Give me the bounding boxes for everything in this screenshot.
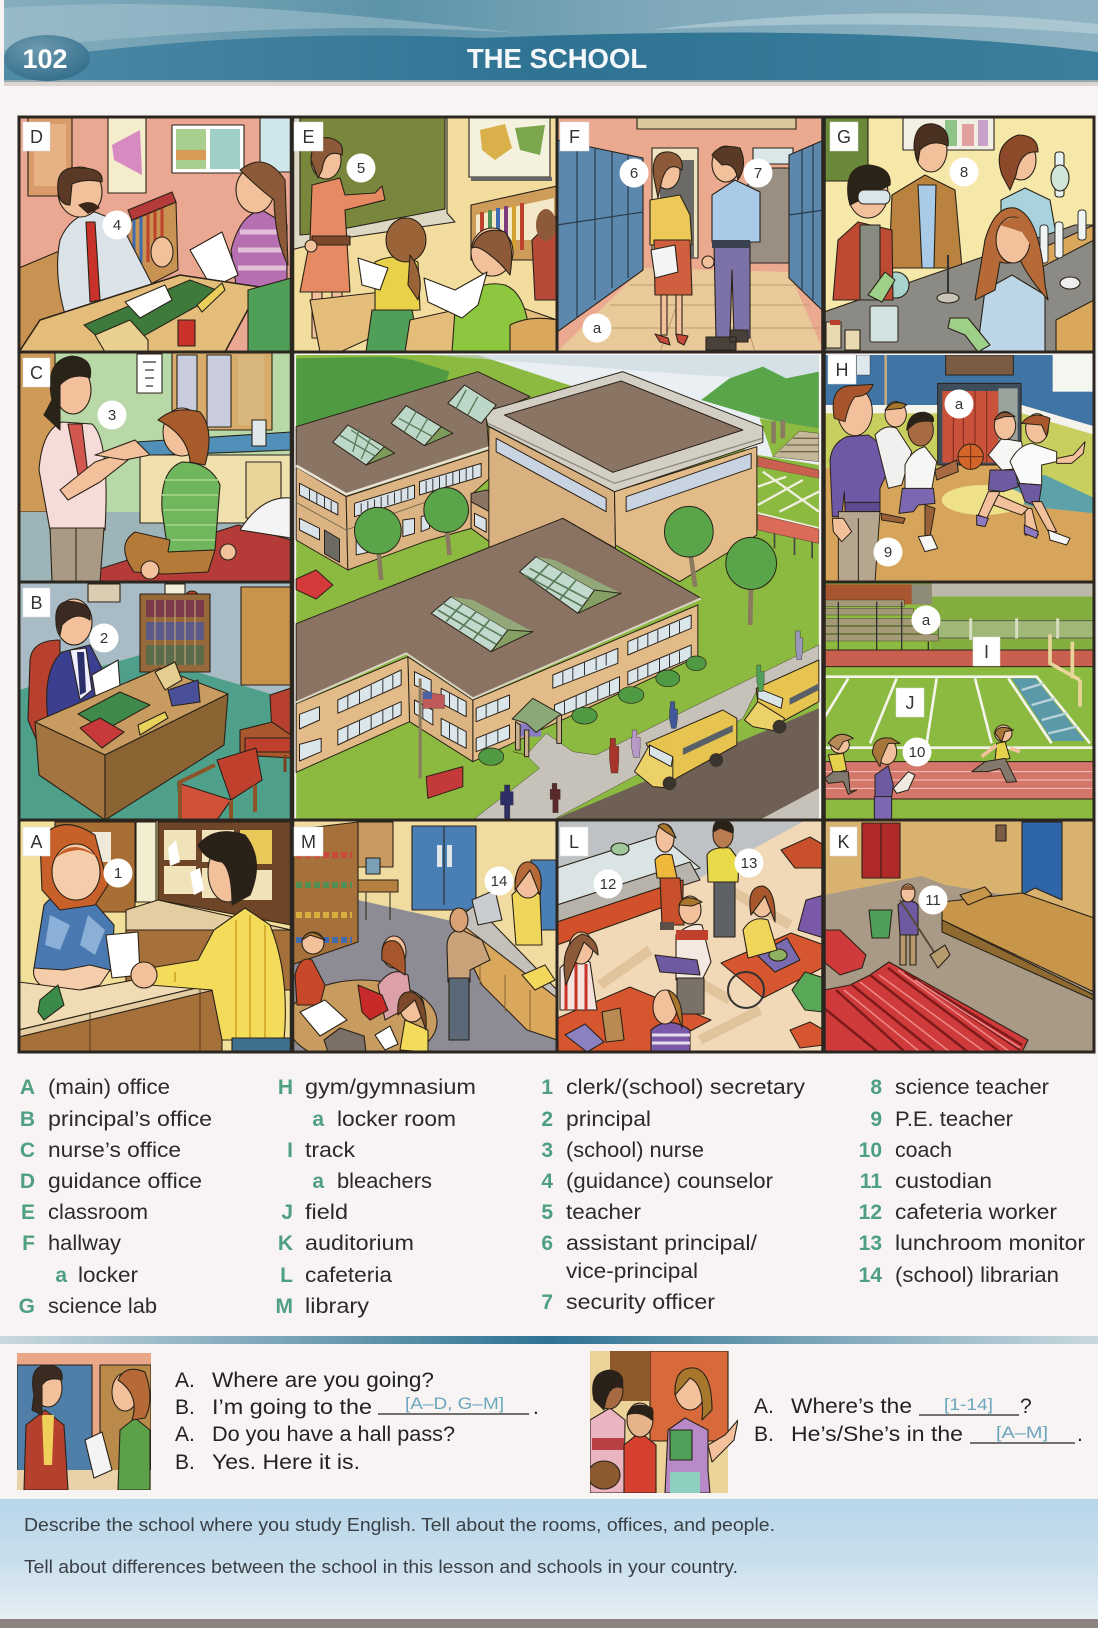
vocabulary list: people 8 to 14: cafeteria worker	[895, 1201, 1057, 1224]
vocabulary list: places A to G: guidance office	[48, 1170, 202, 1193]
student	[190, 162, 288, 300]
vocabulary list: places A to G: locker	[78, 1264, 138, 1287]
runners	[825, 725, 1020, 794]
vocabulary list: people 8 to 14: P.E. teacher	[895, 1108, 1013, 1131]
label I: I	[984, 642, 989, 662]
vocabulary list: places H to M: I	[287, 1139, 293, 1162]
callout 1: 1	[114, 865, 122, 882]
label C: C	[30, 363, 43, 383]
vocabulary list: places H to M: track	[305, 1139, 356, 1162]
panel C: nurse's office	[20, 354, 290, 580]
dialogue text: right: ?	[1020, 1395, 1032, 1418]
vocabulary list: places H to M: bleachers	[337, 1170, 432, 1193]
label E: E	[302, 127, 315, 147]
vocabulary list: places H to M	[276, 1076, 476, 1318]
discussion prompt 2: Tell about differences between the school in this lesson and schools in your country.	[24, 1557, 738, 1577]
callout 5	[346, 154, 376, 182]
vocabulary list: people 1 to 7: teacher	[566, 1201, 641, 1224]
callout 7	[744, 158, 772, 188]
pedestrians	[500, 631, 803, 818]
P.E. teacher	[830, 384, 890, 582]
callout 10	[902, 738, 932, 766]
athletic field	[758, 431, 819, 558]
bus 2	[744, 660, 819, 733]
cafeteria worker	[655, 824, 684, 930]
dialogue text: left: B.	[175, 1451, 195, 1474]
vocabulary list: places H to M: J	[281, 1201, 293, 1224]
vocabulary list: places H to M: locker room	[337, 1108, 456, 1131]
students	[875, 402, 1085, 552]
dialogue text: left: Do you have a hall pass?	[212, 1423, 455, 1446]
vocabulary list: places H to M: M	[276, 1295, 293, 1318]
callout 12	[594, 870, 622, 898]
label H	[828, 355, 856, 384]
upper student	[999, 135, 1069, 240]
bleachers	[825, 584, 938, 650]
dialogue text: left: .	[533, 1396, 539, 1419]
vocabulary list: people 1 to 7	[541, 1076, 806, 1314]
custodian	[898, 884, 950, 968]
callout 2	[90, 624, 118, 652]
dialogue illustration: right	[590, 1351, 738, 1493]
desk	[35, 662, 228, 820]
vocabulary list: places A to G	[19, 1076, 212, 1318]
label C	[23, 358, 50, 387]
vocabulary list: people 1 to 7: principal	[566, 1108, 651, 1131]
flag pole	[420, 678, 444, 778]
boy with goggles	[833, 165, 895, 302]
vocabulary list: places A to G: nurse’s office	[48, 1139, 181, 1162]
label F	[560, 122, 589, 151]
callout bleachers a: a	[922, 612, 931, 629]
label K	[830, 827, 857, 856]
dialogue text: left: B.	[175, 1396, 195, 1419]
panel A: main office	[20, 822, 290, 1050]
readers	[295, 932, 428, 1052]
chairs	[178, 688, 291, 820]
dialogue text: right: He’s/She’s in the	[791, 1423, 963, 1446]
tables	[557, 837, 824, 1052]
dialogue text: left: Yes. Here it is.	[212, 1451, 360, 1474]
callout 2: 2	[100, 630, 108, 647]
student in wheelchair	[728, 886, 777, 1008]
title: THE SCHOOL	[467, 43, 647, 74]
callout 14	[484, 866, 514, 896]
circulation desk	[456, 905, 557, 1040]
label A: A	[30, 832, 43, 852]
lower student	[948, 208, 1048, 352]
label E	[294, 122, 323, 151]
security officer	[702, 146, 760, 350]
vocabulary list: places A to G: E	[21, 1201, 35, 1224]
connector	[471, 490, 548, 547]
vocabulary list: people 8 to 14: 13	[859, 1232, 882, 1255]
label L: L	[569, 832, 579, 852]
vocabulary list: people 1 to 7: 4	[541, 1170, 553, 1193]
dialogue text: right: B.	[754, 1423, 774, 1446]
skylights on front roof	[431, 557, 621, 652]
label F: F	[569, 127, 580, 147]
door	[412, 826, 557, 930]
number callouts	[90, 154, 978, 914]
callout locker room a: a	[955, 396, 964, 413]
round table	[287, 980, 437, 1064]
counter	[19, 962, 230, 1030]
vocabulary list: people 1 to 7: vice-principal	[566, 1260, 698, 1283]
label M	[294, 827, 323, 856]
vocabulary list: people 1 to 7: security officer	[566, 1291, 715, 1314]
librarian	[472, 862, 542, 945]
trees background	[296, 357, 819, 457]
vocabulary list: people 8 to 14: lunchroom monitor	[895, 1232, 1085, 1255]
seated students	[560, 895, 824, 1052]
vocabulary list: places A to G: C	[20, 1139, 35, 1162]
callout 4	[102, 210, 132, 240]
vocabulary list: places A to G: principal’s office	[48, 1108, 212, 1131]
teacher	[300, 138, 385, 338]
dialogue text: right: A.	[754, 1395, 774, 1418]
student	[131, 832, 292, 1052]
panel L: cafeteria	[558, 822, 822, 1050]
vocabulary list: places H to M: auditorium	[305, 1232, 414, 1255]
callout 7: 7	[754, 165, 762, 182]
front building	[296, 518, 701, 772]
field	[825, 675, 1095, 752]
label B	[23, 588, 50, 617]
dialogue text: left: A.	[175, 1369, 195, 1392]
principal	[28, 599, 122, 760]
vocabulary list: people 8 to 14	[859, 1076, 1085, 1287]
vocabulary list: people 1 to 7: 7	[541, 1291, 553, 1314]
label G	[830, 122, 858, 151]
page number badge: 102	[22, 44, 68, 74]
callout 8	[950, 158, 978, 186]
callout 9	[874, 538, 902, 566]
callout 11: 11	[925, 892, 941, 909]
bookshelves	[291, 822, 358, 965]
dialogue text: left: I’m going to the	[212, 1396, 372, 1419]
seats	[824, 930, 1028, 1052]
callout 1	[104, 858, 132, 888]
bookcase	[140, 594, 210, 672]
vocabulary list: places H to M: L	[280, 1264, 293, 1287]
page number badge	[4, 35, 90, 81]
fence	[938, 618, 1095, 640]
label J: J	[906, 693, 914, 713]
vocabulary list: places A to G: A	[20, 1076, 35, 1099]
locker room	[938, 383, 1021, 465]
dialogue text: left: Where are you going?	[212, 1369, 434, 1392]
serving counter	[557, 835, 700, 945]
vocabulary list: people 1 to 7: 6	[541, 1232, 553, 1255]
vocabulary list: places H to M: gym/gymnasium	[305, 1076, 476, 1099]
discussion prompt 1: Describe the school where you study English. Tell about the rooms, offices, and people.	[24, 1515, 775, 1535]
callout 5: 5	[357, 160, 365, 177]
cabinet	[172, 352, 272, 430]
callout 8: 8	[960, 164, 968, 181]
dialogue text: right: [1-14]	[944, 1395, 993, 1414]
label I	[973, 637, 1000, 666]
panel: school building aerial view	[296, 355, 820, 818]
panel frame lines	[19, 117, 1094, 1052]
vocabulary list: places A to G: a	[55, 1264, 67, 1287]
bookcase	[19, 202, 178, 352]
clerk	[34, 825, 114, 995]
vocabulary list: people 8 to 14: 11	[860, 1170, 882, 1193]
callout 12: 12	[600, 876, 616, 893]
driveway, sidewalk and street	[473, 645, 819, 820]
entrance canopy	[512, 698, 562, 757]
goal post	[1050, 634, 1080, 707]
callout 3: 3	[108, 407, 116, 424]
dialogue text: right	[754, 1395, 1083, 1446]
gym block	[484, 372, 763, 582]
vocabulary list: places A to G: hallway	[48, 1232, 122, 1255]
student with tray	[655, 896, 711, 1014]
discussion panel	[0, 1499, 1098, 1619]
callout 13	[734, 848, 764, 878]
vocabulary list: places H to M: K	[278, 1232, 293, 1255]
vocabulary list: places A to G: science lab	[48, 1295, 157, 1318]
vocabulary list: people 8 to 14: custodian	[895, 1170, 992, 1193]
vocabulary list: people 8 to 14: 8	[870, 1076, 882, 1099]
dialogue text: left	[175, 1369, 539, 1474]
vocabulary list: places H to M: a	[312, 1170, 324, 1193]
dialogue text: left: A.	[175, 1423, 195, 1446]
vocabulary list: people 1 to 7: (guidance) counselor	[566, 1170, 773, 1193]
vocabulary list: people 8 to 14: science teacher	[895, 1076, 1049, 1099]
bottom edge band	[0, 1619, 1098, 1628]
label H: H	[836, 360, 848, 380]
vocabulary list: people 8 to 14: 14	[859, 1264, 882, 1287]
vocabulary list: places H to M: a	[312, 1108, 324, 1131]
bed	[77, 525, 291, 582]
lab bench	[824, 225, 1094, 352]
bookshelf	[471, 186, 557, 260]
dialogue text: right: [A–M]	[996, 1423, 1048, 1442]
science teacher	[889, 124, 962, 268]
callout locker room a	[944, 390, 974, 418]
student girl	[310, 218, 426, 352]
panel E: classroom	[294, 118, 556, 350]
panel M: library	[294, 822, 556, 1050]
back skylights	[333, 385, 496, 465]
picnic table	[296, 570, 333, 599]
vocabulary list: places A to G: F	[22, 1232, 35, 1255]
mail cubbies	[158, 822, 291, 925]
vocabulary list: people 1 to 7: 5	[541, 1201, 553, 1224]
vocabulary list: places H to M: cafeteria	[305, 1264, 392, 1287]
vocabulary list: people 8 to 14: 9	[870, 1108, 882, 1131]
scoreboard	[946, 355, 1013, 375]
label D: D	[30, 127, 43, 147]
header banner	[4, 0, 1098, 86]
vocabulary list: places A to G: classroom	[48, 1201, 148, 1224]
desk	[19, 275, 260, 352]
dialogue text: right: Where’s the	[791, 1395, 912, 1418]
vocabulary list: people 8 to 14: coach	[895, 1139, 952, 1162]
vocabulary list: places H to M: field	[305, 1201, 348, 1224]
boy patient	[125, 408, 236, 579]
vocabulary list: people 1 to 7: clerk/(school) secretary	[566, 1076, 806, 1099]
stage	[942, 893, 1094, 992]
shrubs	[478, 656, 706, 765]
label M: M	[301, 832, 316, 852]
dialogue text: left: [A–D, G–M]	[405, 1394, 504, 1413]
dialogue text: right: .	[1077, 1423, 1083, 1446]
student boy	[405, 209, 557, 352]
vocabulary list: places A to G: (main) office	[48, 1076, 170, 1099]
vocabulary list: people 1 to 7: assistant principal/	[566, 1232, 757, 1255]
label G: G	[837, 127, 851, 147]
label A	[23, 827, 50, 856]
callout 6	[620, 158, 648, 188]
vocabulary list: places A to G: B	[20, 1108, 35, 1131]
panel D: guidance office	[20, 118, 290, 350]
callout 10: 10	[909, 744, 925, 761]
lunchroom monitor	[707, 820, 739, 937]
callout locker a: a	[593, 320, 602, 337]
coach	[872, 738, 915, 820]
trash can	[869, 910, 892, 938]
panel B: principal's office	[20, 584, 290, 818]
callout 9: 9	[884, 544, 892, 561]
panel H: gymnasium	[826, 355, 1092, 580]
counselor	[58, 167, 173, 330]
vocabulary list: people 1 to 7: 3	[541, 1139, 553, 1162]
label D	[23, 122, 50, 151]
vocabulary list: places A to G: G	[19, 1295, 35, 1318]
vocabulary list: people 1 to 7: (school) nurse	[566, 1139, 704, 1162]
curtain	[1022, 822, 1062, 900]
bus 1	[634, 710, 737, 790]
assistant principal	[650, 152, 692, 345]
divider bar	[0, 1336, 1098, 1344]
man at desk	[447, 908, 490, 1040]
vocabulary list: people 8 to 14: 10	[859, 1139, 882, 1162]
panel K: auditorium	[826, 822, 1092, 1050]
panel I/J: track and field	[826, 584, 1092, 818]
label K: K	[837, 832, 850, 852]
callout 3	[98, 400, 126, 430]
vocabulary list: places H to M: library	[305, 1295, 370, 1318]
panel G: science lab	[826, 118, 1092, 350]
panel F: hallway	[558, 118, 822, 350]
callout 11	[918, 886, 948, 914]
callout 4: 4	[113, 217, 121, 234]
nurse	[39, 356, 150, 582]
vocabulary list: people 1 to 7: 1	[541, 1076, 553, 1099]
vocabulary list: people 8 to 14: (school) librarian	[895, 1264, 1059, 1287]
label B: B	[30, 593, 43, 613]
callout 13: 13	[741, 855, 757, 872]
callout bleachers a	[912, 606, 940, 634]
lower track	[825, 762, 1095, 799]
lockers	[557, 140, 643, 332]
vocabulary list: people 8 to 14: 12	[859, 1201, 882, 1224]
label L	[560, 827, 588, 856]
label J	[896, 688, 924, 717]
dialogue illustration: left	[17, 1353, 151, 1490]
upper track	[825, 650, 1095, 667]
vocabulary list: people 1 to 7: 2	[541, 1108, 553, 1131]
back wing	[296, 372, 530, 570]
sign	[426, 767, 463, 798]
callout 6: 6	[630, 165, 638, 182]
letter labels	[23, 122, 1000, 856]
trees	[354, 488, 776, 625]
vocabulary list: places H to M: H	[278, 1076, 293, 1099]
callout locker a	[582, 314, 612, 342]
callout 14: 14	[491, 873, 507, 890]
vocabulary list: places A to G: D	[20, 1170, 35, 1193]
